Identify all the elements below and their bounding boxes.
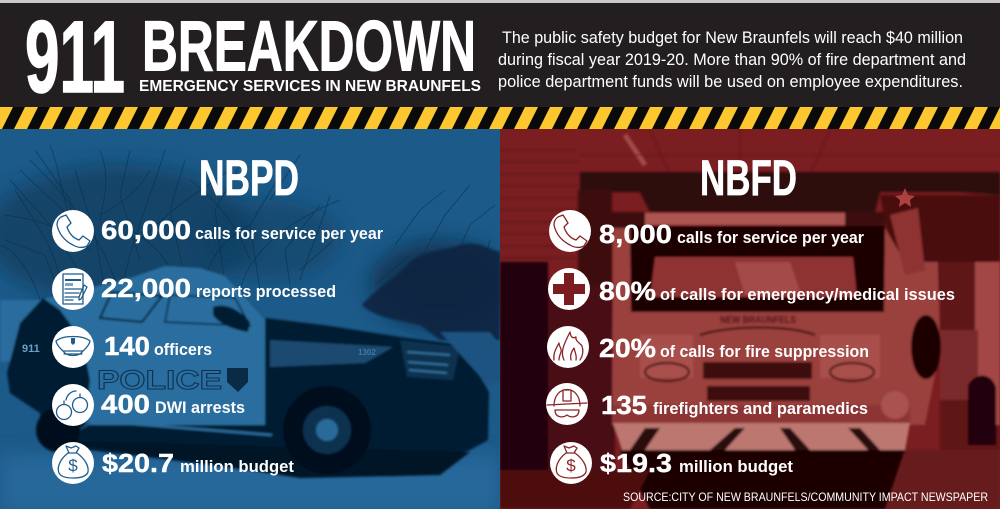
background vehicle: [440, 332, 500, 385]
stat: 400 DWI arrests: 400: [101, 389, 150, 419]
icon: phone: [52, 210, 94, 252]
stat: $20.7 million budget: $20.7: [102, 448, 174, 478]
grille: [400, 340, 460, 380]
hazard stripe band: [0, 107, 1000, 129]
stat: 8,000 calls: calls for service per year: [677, 229, 865, 247]
stat: 80% emergency: [548, 268, 955, 310]
stat: 60,000 calls: calls for service per year: [195, 225, 384, 243]
intro paragraph: The public safety budget for New Braunfels will reach $40 million: [502, 29, 963, 47]
intro paragraph: during fiscal year 2019-20. More than 90% of fire department and: [498, 51, 966, 69]
stat: 60,000 calls: 60,000: [101, 215, 191, 245]
mirror: [213, 305, 250, 332]
right bay: [880, 195, 1000, 300]
snow ground and car cabin: [0, 299, 42, 363]
stat: 20% fire: 20%: [599, 333, 656, 363]
stat: 22,000 reports: 22,000: [101, 273, 191, 303]
stat: $19.3 million budget: $19.3: [600, 448, 672, 478]
stat: $19.3 million budget: [550, 442, 793, 484]
heading: NBPD: NBPD: [199, 150, 299, 206]
stat: 8,000 calls: 8,000: [599, 219, 672, 249]
title: 911: 911: [25, 0, 125, 114]
icon: money bag: [52, 442, 94, 484]
icon: flames: [547, 326, 589, 368]
ceiling: [625, 135, 645, 165]
heading: NBFD: NBFD: [700, 150, 797, 206]
under truck and floor: [620, 450, 910, 509]
star: [895, 188, 915, 207]
car lettering: 911: [22, 343, 40, 355]
stat: $19.3 million budget: million budget: [679, 458, 793, 476]
front dark body: [76, 316, 490, 468]
dark side pillars: [578, 190, 612, 290]
icon: police cap: [52, 326, 94, 368]
panel: NBFD: [500, 129, 1000, 509]
stat: 80% emergency: 80%: [599, 276, 656, 306]
icon: money bag: $: [566, 456, 576, 475]
icon: firefighter helmet: [546, 383, 588, 425]
stat: 60,000 calls: [52, 210, 384, 252]
stat: 22,000 reports: reports processed: [196, 283, 336, 301]
police car background photo: [0, 129, 510, 509]
stat: 8,000 calls: [549, 210, 865, 252]
stat: $20.7 million budget: [52, 442, 294, 484]
icon: money bag: [550, 442, 592, 484]
dark beam: [580, 172, 1000, 212]
stat: 80% emergency: of calls for emergency/medical issues: [660, 286, 955, 304]
bumper band: [612, 405, 910, 423]
stat: 140 officers: [52, 326, 212, 368]
icon: report: [52, 268, 94, 310]
icon: medical cross: [548, 268, 590, 310]
truck body: [612, 228, 940, 425]
car lettering: [22, 343, 376, 395]
car lettering: POLICE: [97, 365, 222, 395]
title: BREAKDOWN: BREAKDOWN: [142, 8, 476, 86]
stat: 135 firefighters: 135: [601, 390, 647, 420]
stat: 400 DWI arrests: DWI arrests: [155, 399, 245, 417]
icon: phone: [549, 210, 591, 252]
mirrors: [890, 208, 925, 275]
dark rear: [7, 298, 90, 442]
fire truck background photo: [500, 129, 1000, 509]
stat: 20% fire: [547, 326, 869, 368]
car lettering: 1302: [358, 348, 376, 357]
name plate: NEW BRAUNFELS: [720, 315, 796, 326]
rear wheel: [36, 408, 80, 452]
wheel: [911, 315, 941, 379]
stat: 140 officers: 140: [104, 331, 150, 361]
icon: money bag: $: [68, 456, 78, 475]
grille: [703, 362, 812, 401]
intro paragraph: police department funds will be used on employee expenditures.: [498, 73, 963, 91]
windshield frame: [630, 226, 885, 312]
headlights: [640, 335, 693, 378]
stat: $20.7 million budget: million budget: [180, 458, 294, 476]
stat: 22,000 reports: [52, 268, 336, 310]
windows outline: [100, 292, 162, 322]
stat: 135 firefighters: firefighters and paramedics: [653, 400, 868, 418]
panel: NBPD: [0, 129, 510, 509]
intro paragraph: [498, 29, 966, 91]
hood: [270, 340, 393, 367]
left wall slats: [500, 150, 580, 258]
stat: 135 firefighters: [546, 383, 868, 425]
icon: handcuffs: [52, 384, 94, 426]
front wheel: [283, 386, 371, 474]
shadow: [50, 440, 470, 478]
header band: [0, 0, 1000, 114]
stat: 400 DWI arrests: [52, 384, 245, 426]
light streak: [131, 424, 274, 438]
stat: 20% fire: of calls for fire suppression: [660, 343, 869, 361]
subtitle: EMERGENCY SERVICES IN NEW BRAUNFELS: [139, 78, 481, 95]
hood line: [700, 328, 815, 335]
stat: 140 officers: officers: [154, 341, 212, 359]
